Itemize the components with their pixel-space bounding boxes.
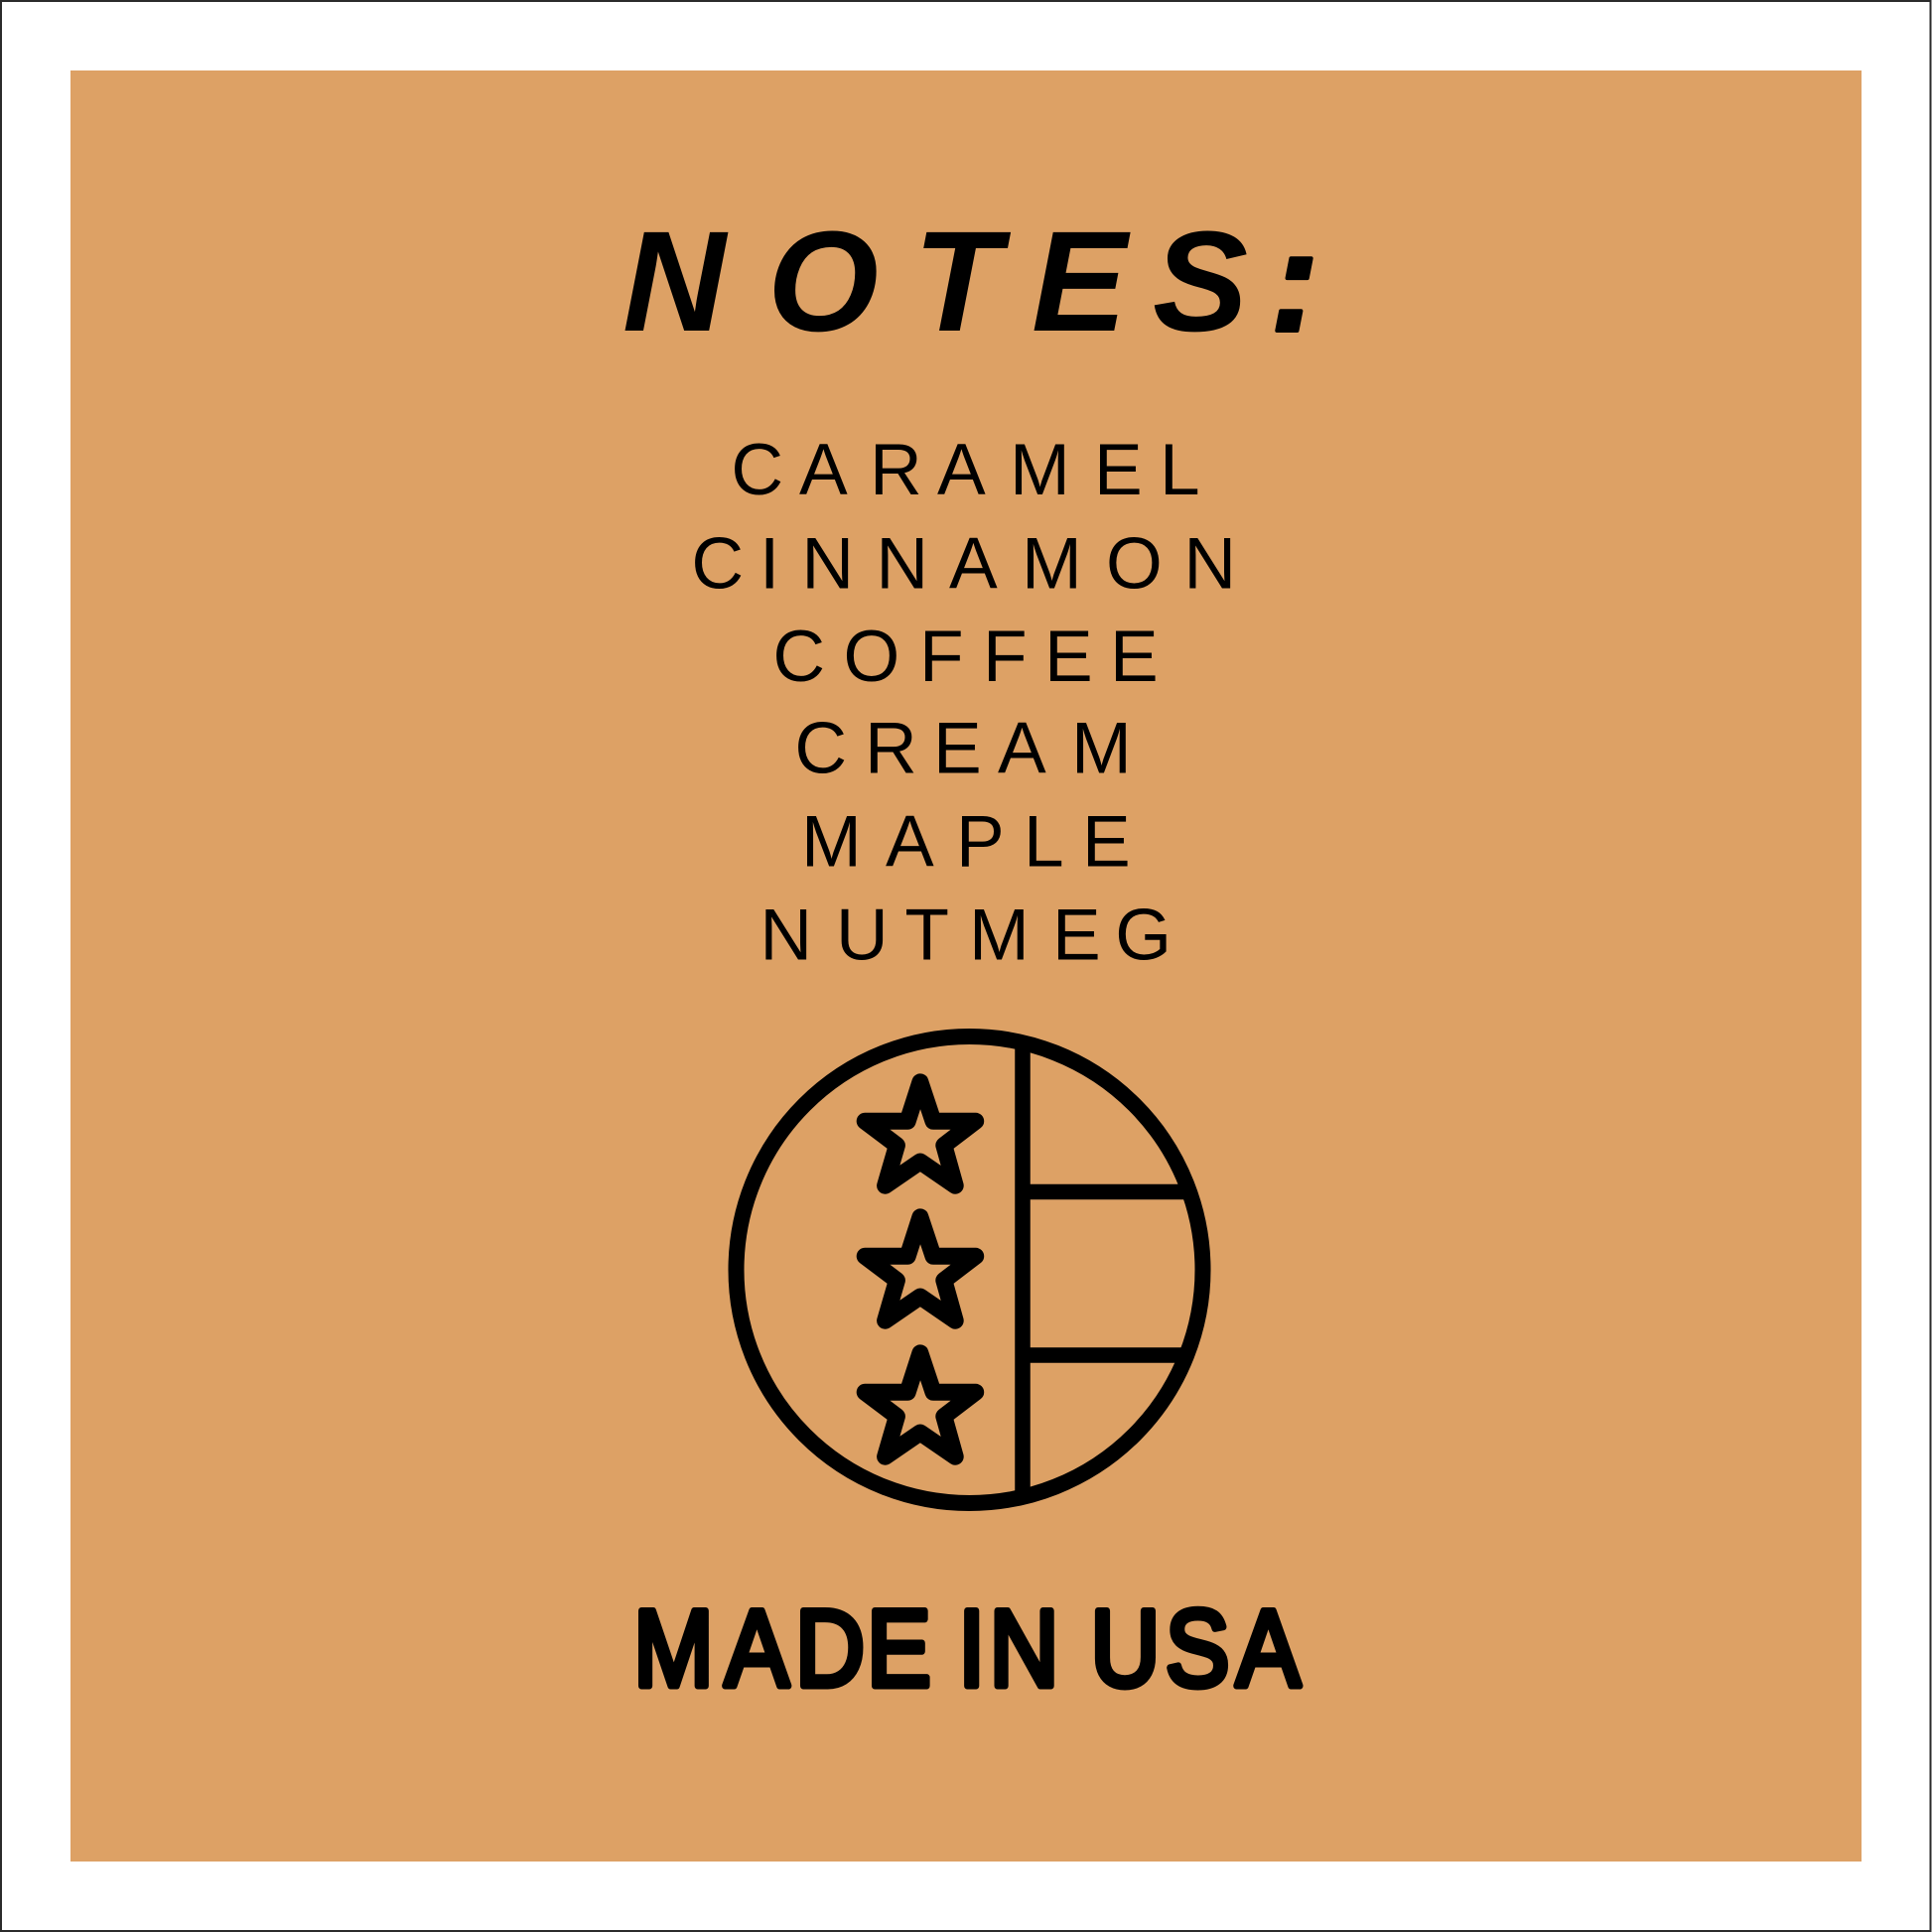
star 3 <box>865 1353 976 1456</box>
star 1 <box>865 1082 976 1185</box>
note: caramel: CARAMEL <box>731 430 1200 510</box>
text block: flavor notes list <box>691 430 1236 975</box>
note: coffee: COFFEE <box>772 617 1159 697</box>
flag lower stripe <box>1023 1347 1188 1363</box>
badge ring <box>737 1036 1203 1503</box>
made in USA caption: MADE IN USA <box>633 1587 1301 1709</box>
flag upper stripe <box>1023 1184 1188 1199</box>
title: NOTES: <box>622 202 1318 361</box>
note: cinnamon: CINNAMON <box>691 524 1236 604</box>
note: maple: MAPLE <box>801 802 1131 882</box>
note: nutmeg: NUTMEG <box>759 896 1172 975</box>
flag vertical bar <box>1015 1038 1031 1501</box>
note: cream: CREAM <box>794 709 1132 788</box>
icon: round USA flag badge <box>737 1036 1203 1503</box>
star 2 <box>865 1217 976 1320</box>
